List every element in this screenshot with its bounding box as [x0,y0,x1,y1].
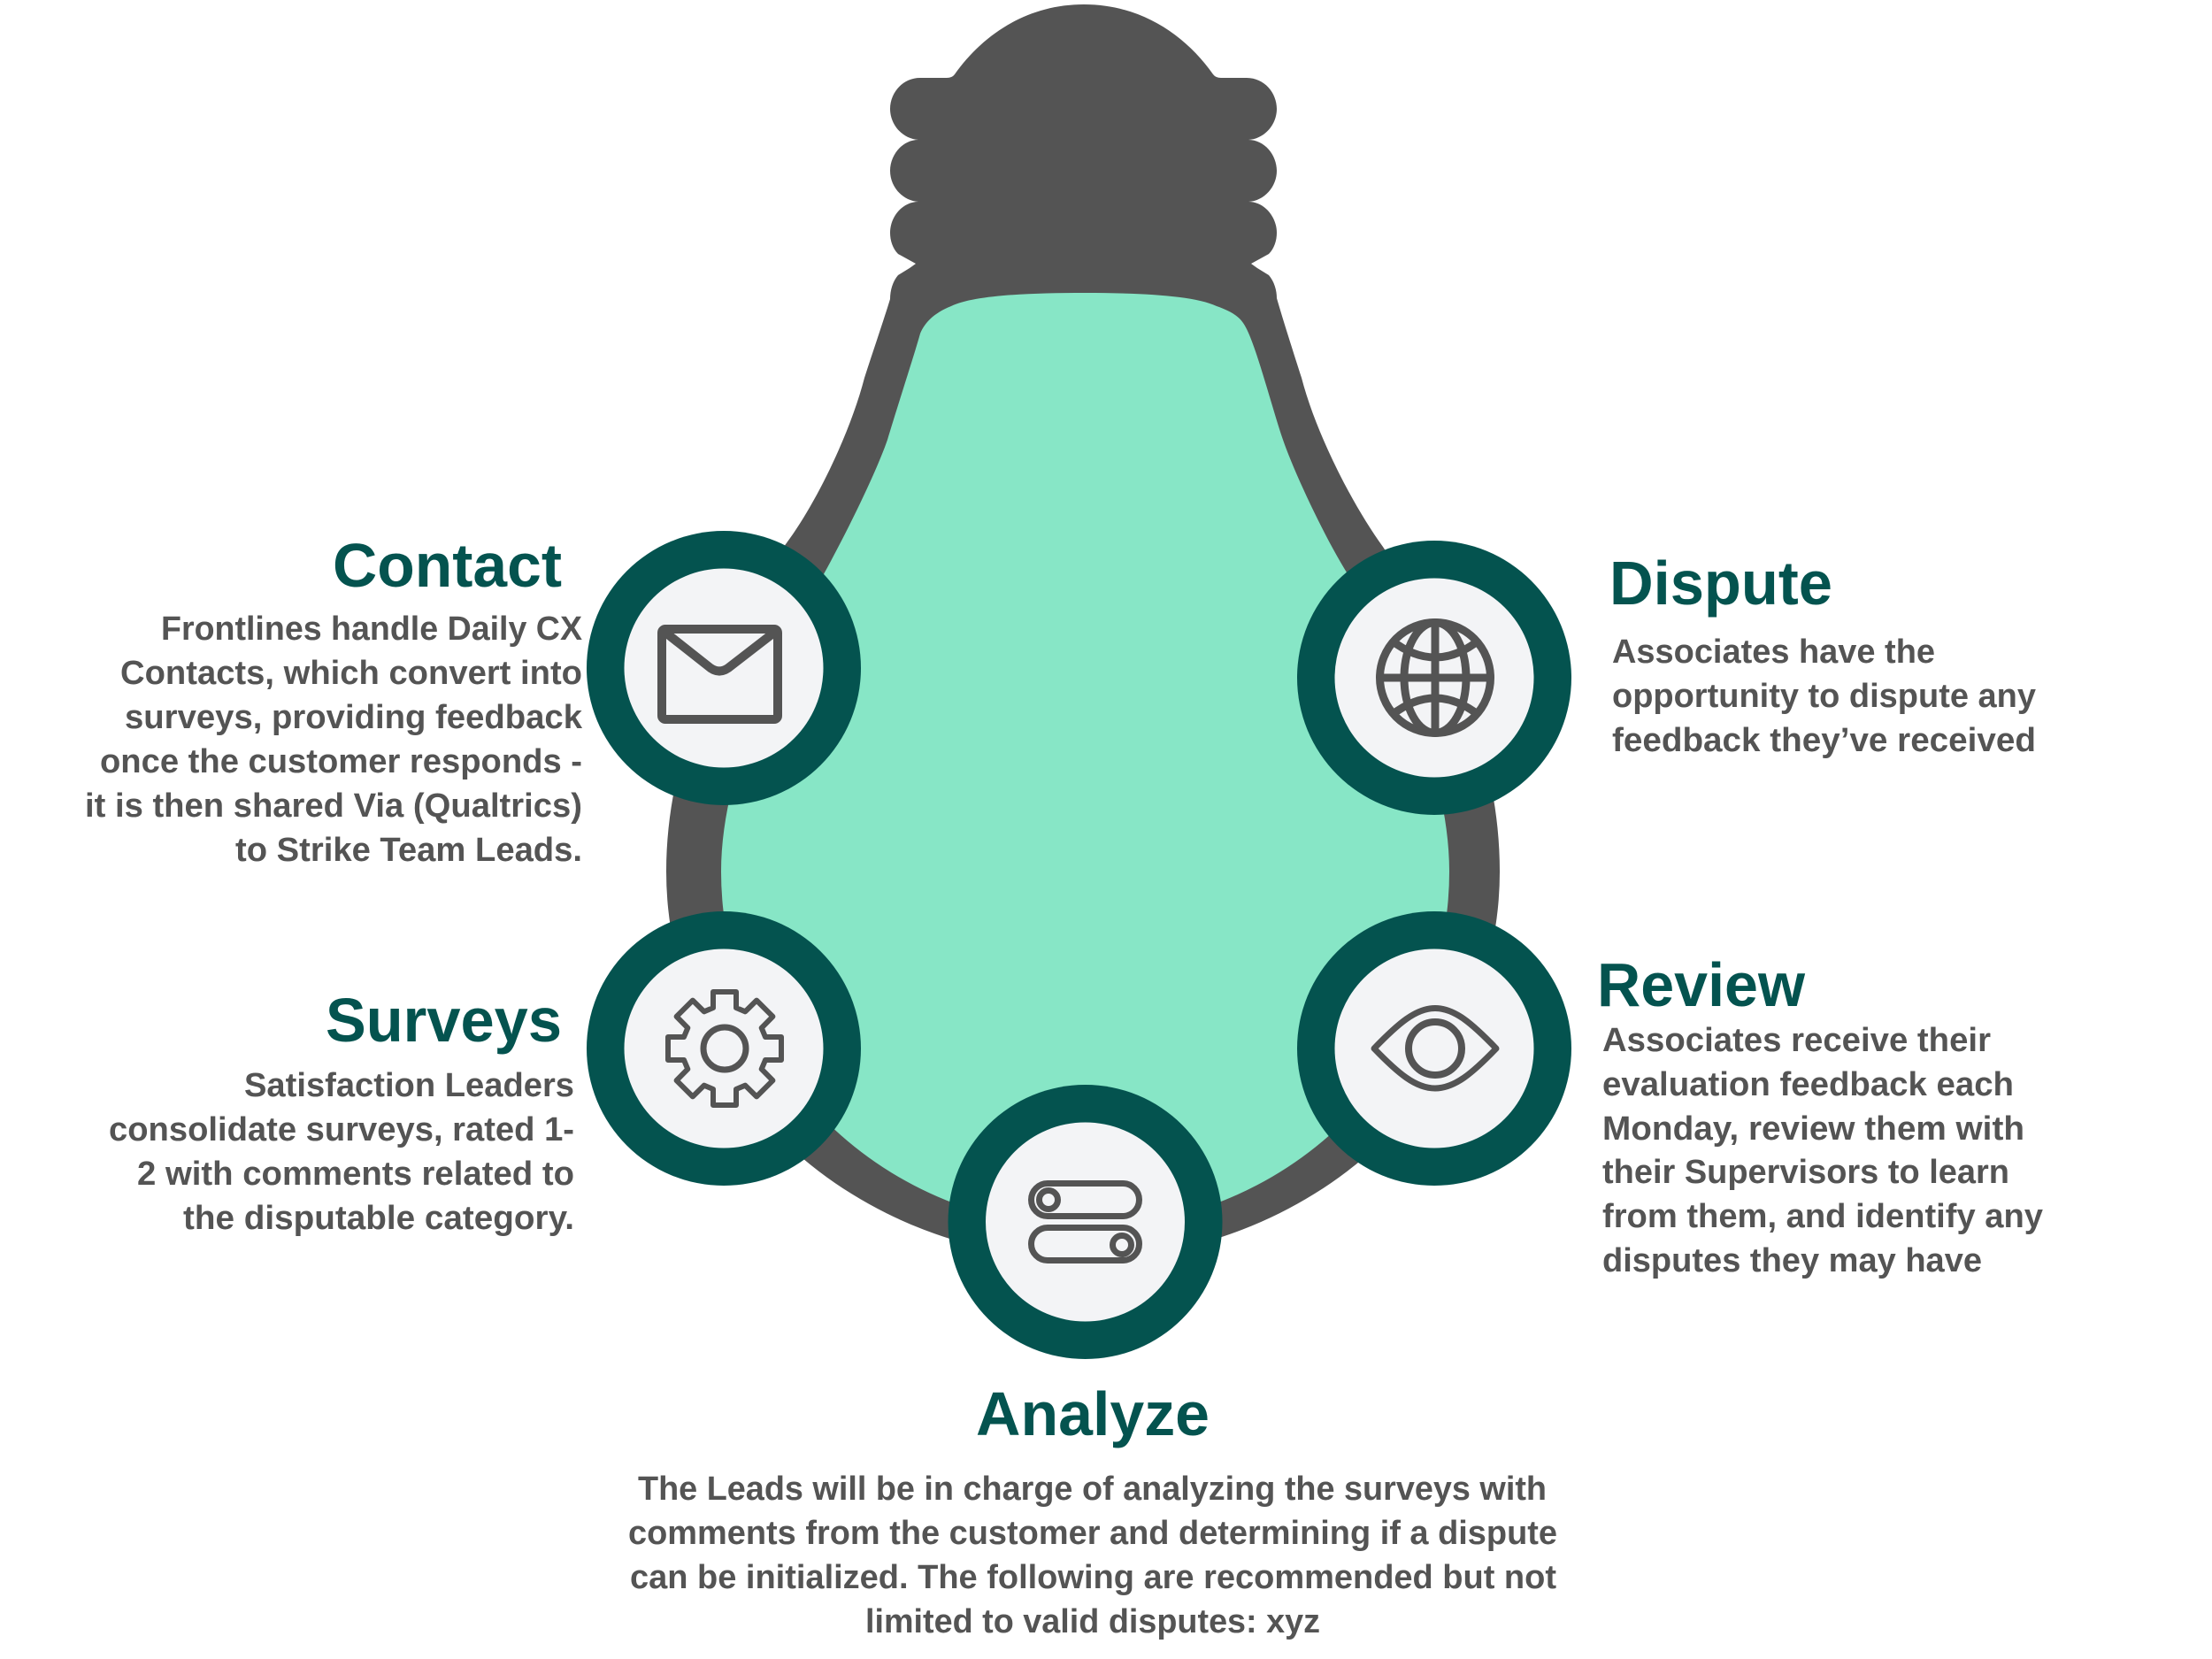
text: dispute description: Associates have the [1612,634,1935,671]
text: analyze description [628,1471,1557,1640]
text: surveys description: the disputable category. [183,1200,574,1237]
text: contact description: Frontlines handle Daily CX [161,611,583,648]
text: contact description: to Strike Team Leads. [235,832,582,869]
panel: dispute [1297,541,2036,815]
text: analyze description: limited to valid disputes: xyz [865,1603,1320,1640]
heading: Review: Review [1597,950,1806,1019]
badge: dispute [1297,541,1571,815]
text: surveys description: consolidate surveys, rated 1- [109,1111,574,1148]
text: dispute description: feedback they’ve received [1612,722,2036,759]
panel: analyze [628,1085,1557,1640]
badge: surveys [587,911,861,1186]
text: dispute description: opportunity to dispute any [1612,678,2036,715]
text: review description: Monday, review them with [1602,1110,2024,1148]
text: analyze description: The Leads will be in charge of analyzing the surveys with [638,1471,1547,1508]
panel: contact [85,531,861,869]
text: contact description: once the customer responds - [100,743,582,780]
text: review description: disputes they may have [1602,1242,1982,1279]
heading: Surveys: Surveys [326,986,562,1055]
text: surveys description: 2 with comments related to [137,1156,574,1193]
icon: eye [1374,1009,1496,1088]
icon: globe [1380,623,1490,733]
text: analyze description: comments from the customer and determining if a dispute [628,1515,1557,1552]
bulb glass [721,293,1449,1227]
panel: surveys [109,911,861,1237]
text: review description: their Supervisors to learn [1602,1154,2009,1191]
heading: Analyze: Analyze [976,1379,1210,1448]
light bulb [666,4,1500,1259]
bulb outline and screw base [666,4,1500,1259]
badge: contact [587,531,861,805]
text: contact description: Contacts, which convert into [120,655,582,692]
heading: Dispute: Dispute [1609,549,1832,618]
text: surveys description [109,1067,574,1237]
text: review description: Associates receive their [1602,1022,1991,1059]
text: contact description: it is then shared Via (Qualtrics) [85,787,582,825]
text: analyze description: can be initialized. The following are recommended but not [630,1559,1556,1596]
text: review description: from them, and identify any [1602,1198,2043,1235]
badge: analyze [949,1085,1223,1359]
icon: envelope [662,629,778,719]
heading: Contact: Contact [333,531,562,600]
text: contact description [85,611,583,869]
text: dispute description [1612,634,2036,759]
icon: gear [668,992,781,1105]
text: review description [1602,1022,2043,1279]
panel: review [1297,911,2043,1279]
icon: toggles [1032,1184,1140,1260]
badge: review [1297,911,1571,1186]
text: review description: evaluation feedback each [1602,1066,2014,1103]
text: contact description: surveys, providing feedback [125,699,583,736]
text: surveys description: Satisfaction Leaders [244,1067,574,1104]
